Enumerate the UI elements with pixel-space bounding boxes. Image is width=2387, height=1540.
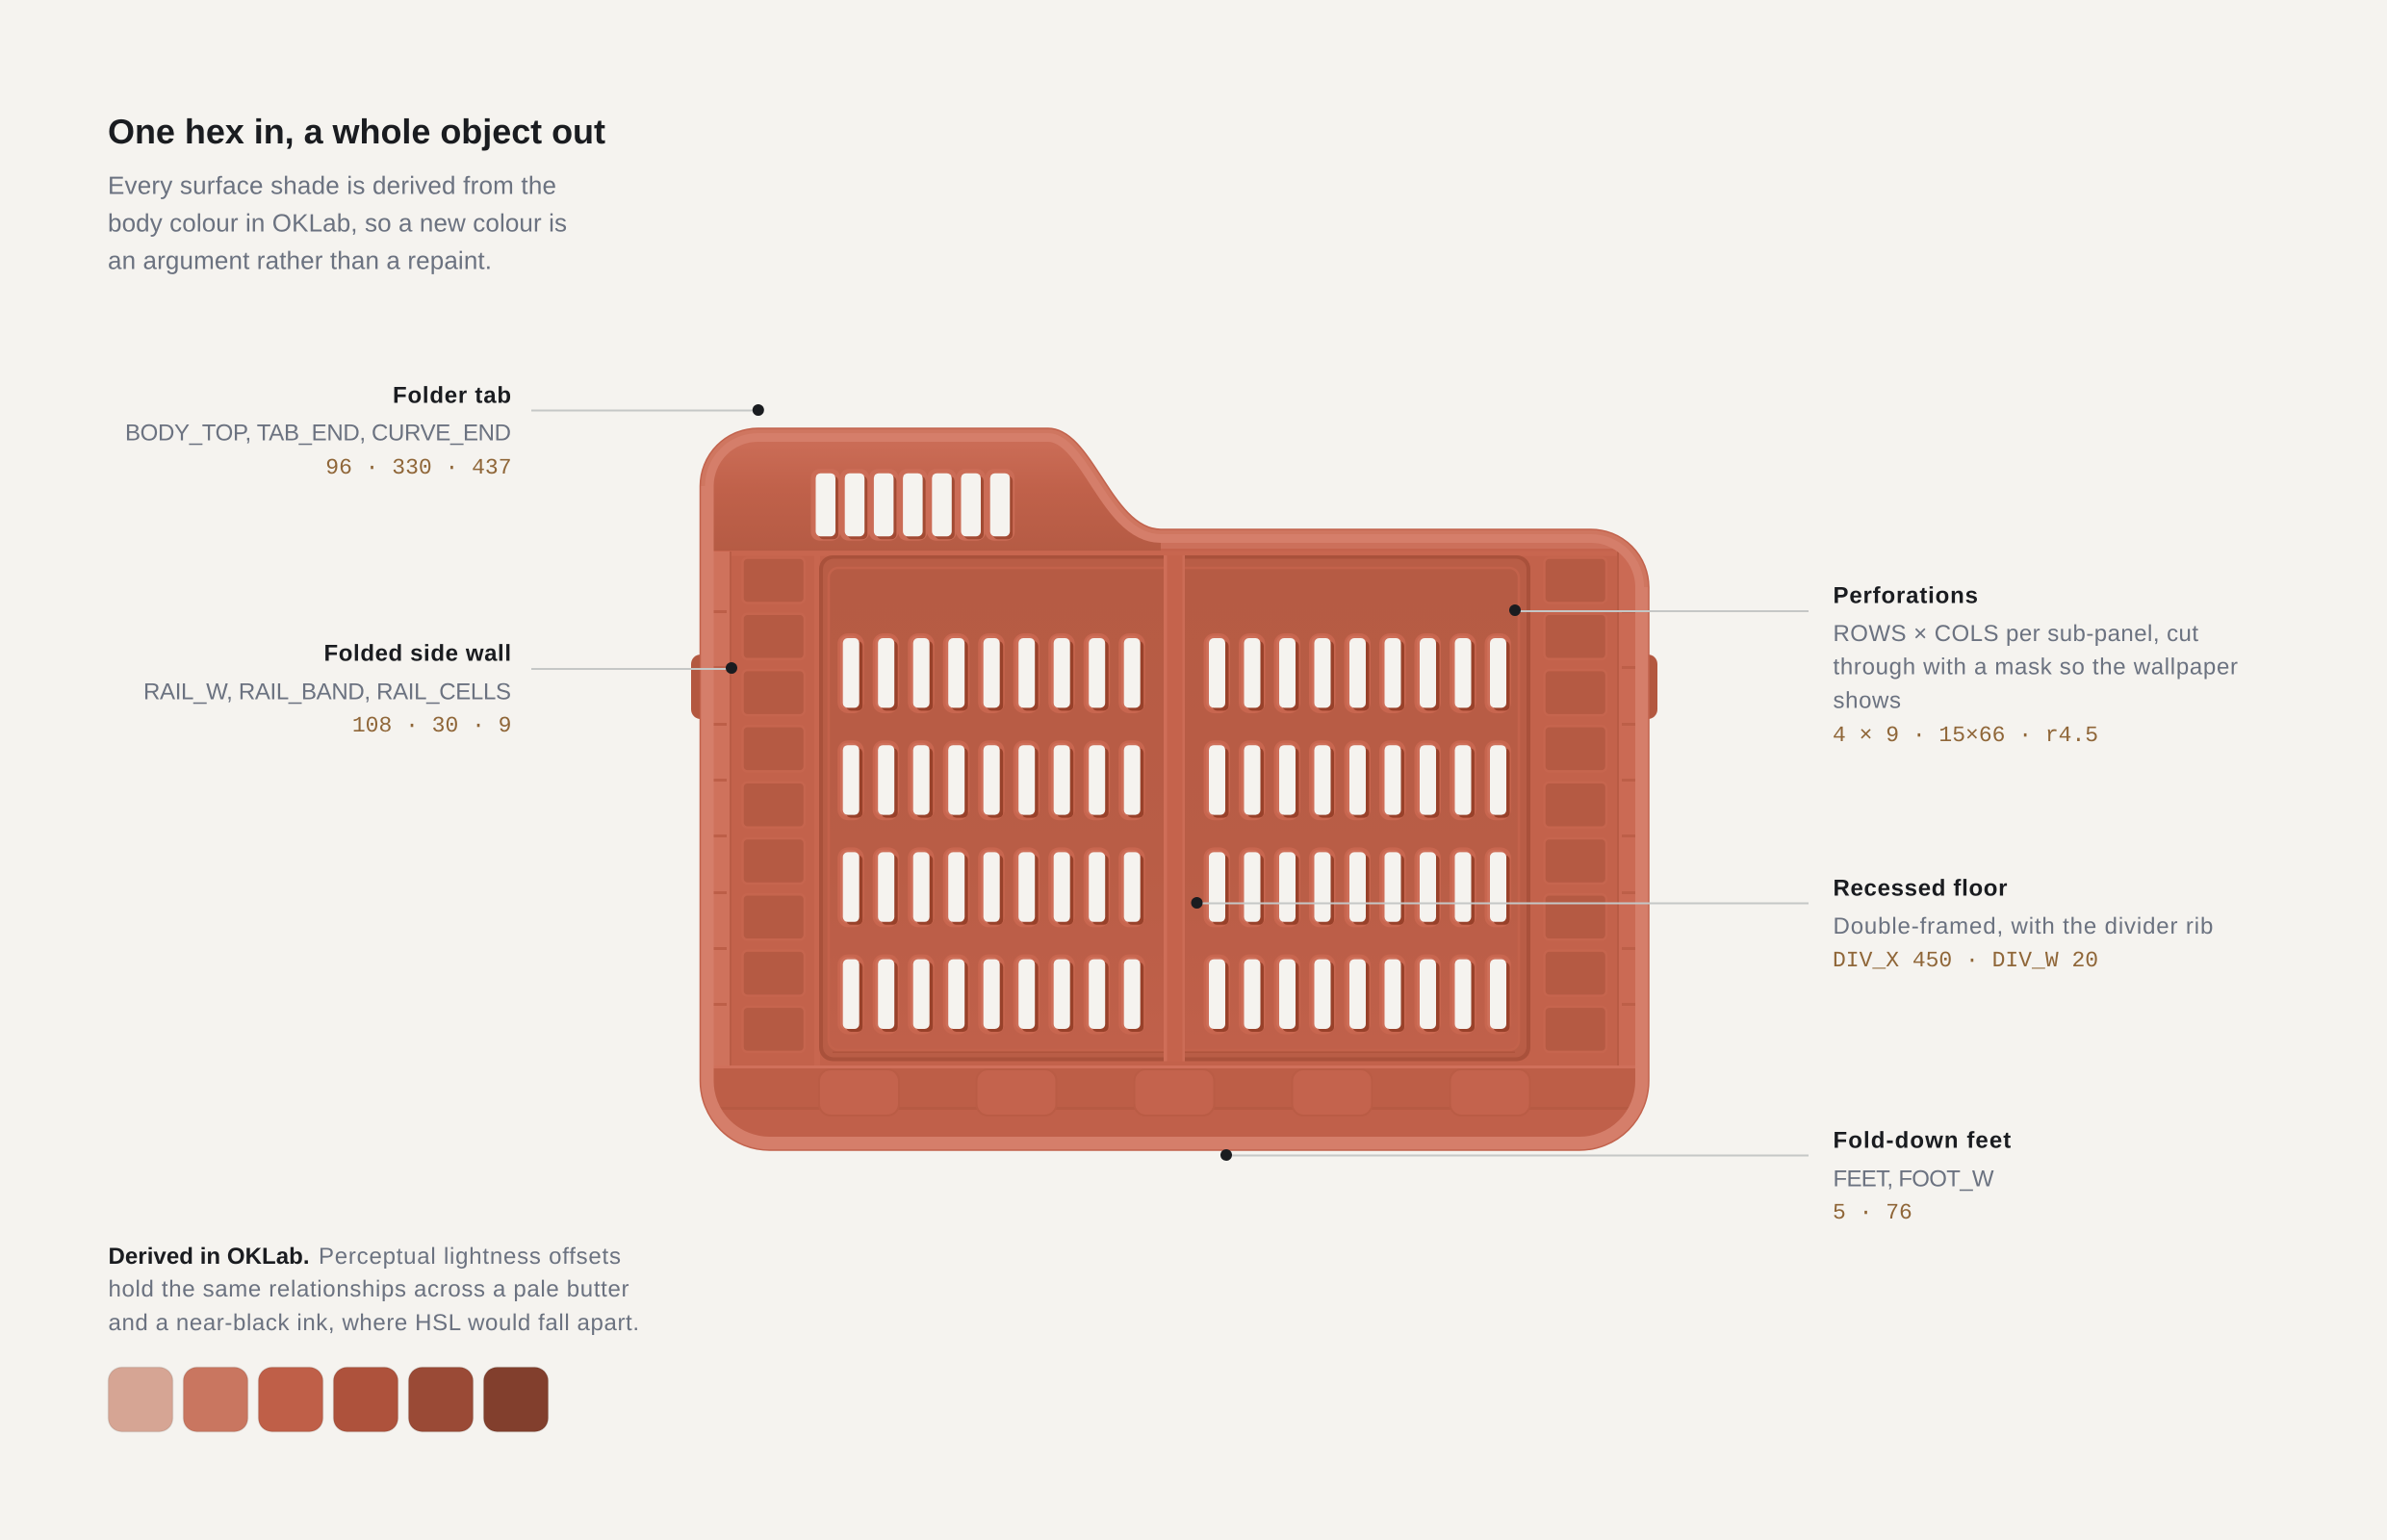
callout: folder tab: Folder tab: [393, 383, 511, 408]
leader: recessed floor: [1192, 897, 1809, 909]
recessed floor: [819, 555, 1530, 1061]
callout: fold-down feet: Fold-down feet: [1833, 1128, 2011, 1153]
callout: fold-down feet: 5 · 76: [1833, 1200, 1912, 1225]
leader: perforations: [1509, 604, 1809, 616]
intro text: body colour in OKLab, so a new colour is: [108, 209, 567, 238]
rim: [701, 428, 1649, 1150]
fold-down feet: [820, 1107, 1528, 1110]
callout: perforations: [1833, 583, 2238, 748]
perforations right sub-panel: [1203, 633, 1511, 1035]
colour swatches: [108, 1367, 549, 1432]
note: derived in OKLab: [108, 1244, 639, 1336]
right rail cells: [1544, 558, 1606, 1052]
callout: recessed floor: [1833, 876, 2213, 973]
leader: folder tab: [531, 404, 764, 416]
folder basket illustration: [691, 428, 1657, 1153]
folder body: [700, 428, 1649, 1153]
callout: perforations: through with a mask so the wallpaper: [1833, 654, 2238, 680]
divider rib: [1164, 555, 1185, 1061]
leader: folded side wall: [531, 662, 737, 674]
callout: recessed floor: DIV_X 450 · DIV_W 20: [1833, 948, 2098, 973]
note: derived in OKLab: hold the same relationships across a pale butter: [108, 1276, 629, 1302]
callout: recessed floor: Recessed floor: [1833, 876, 2008, 901]
callout: folded side wall: 108 · 30 · 9: [352, 713, 512, 738]
left rail cells: [743, 558, 805, 1052]
callout: perforations: 4 × 9 · 15×66 · r4.5: [1833, 723, 2098, 748]
rim top band: [701, 428, 1649, 587]
callout: folder tab: 96 · 330 · 437: [325, 455, 512, 480]
note: derived in OKLab: and a near-black ink, where HSL would fall apart.: [108, 1310, 639, 1336]
tab handle slots: [810, 469, 1014, 541]
callout: recessed floor: Double-framed, with the divider rib: [1833, 913, 2213, 939]
foot band: [714, 1065, 1635, 1137]
callout: folded side wall: [143, 641, 512, 738]
callout: folded side wall: Folded side wall: [323, 641, 511, 666]
callout: folder tab: BODY_TOP, TAB_END, CURVE_END: [125, 421, 511, 447]
leader: fold-down feet: [1220, 1149, 1809, 1161]
intro text: [108, 171, 567, 275]
note: derived in OKLab: Derived in OKLab.: [108, 1244, 310, 1270]
side wall ticks: [713, 610, 1635, 1006]
callout: perforations: Perforations: [1833, 583, 1978, 608]
callout: fold-down feet: FEET, FOOT_W: [1833, 1166, 1994, 1192]
icon: side lugs: [691, 654, 1657, 719]
callout: perforations: shows: [1833, 688, 1901, 714]
callout: folder tab: [125, 383, 512, 480]
callout: folded side wall: RAIL_W, RAIL_BAND, RAIL_CELLS: [143, 680, 511, 706]
callout: fold-down feet: [1833, 1128, 2011, 1225]
intro text: Every surface shade is derived from the: [108, 171, 556, 200]
intro text: an argument rather than a repaint.: [108, 246, 492, 275]
callout: perforations: ROWS × COLS per sub-panel, cut: [1833, 621, 2198, 647]
perforations left sub-panel: [837, 633, 1145, 1035]
title: One hex in, a whole object out: [108, 112, 605, 151]
note: derived in OKLab: Perceptual lightness offsets: [319, 1244, 621, 1270]
outer edge: [701, 428, 1649, 1150]
